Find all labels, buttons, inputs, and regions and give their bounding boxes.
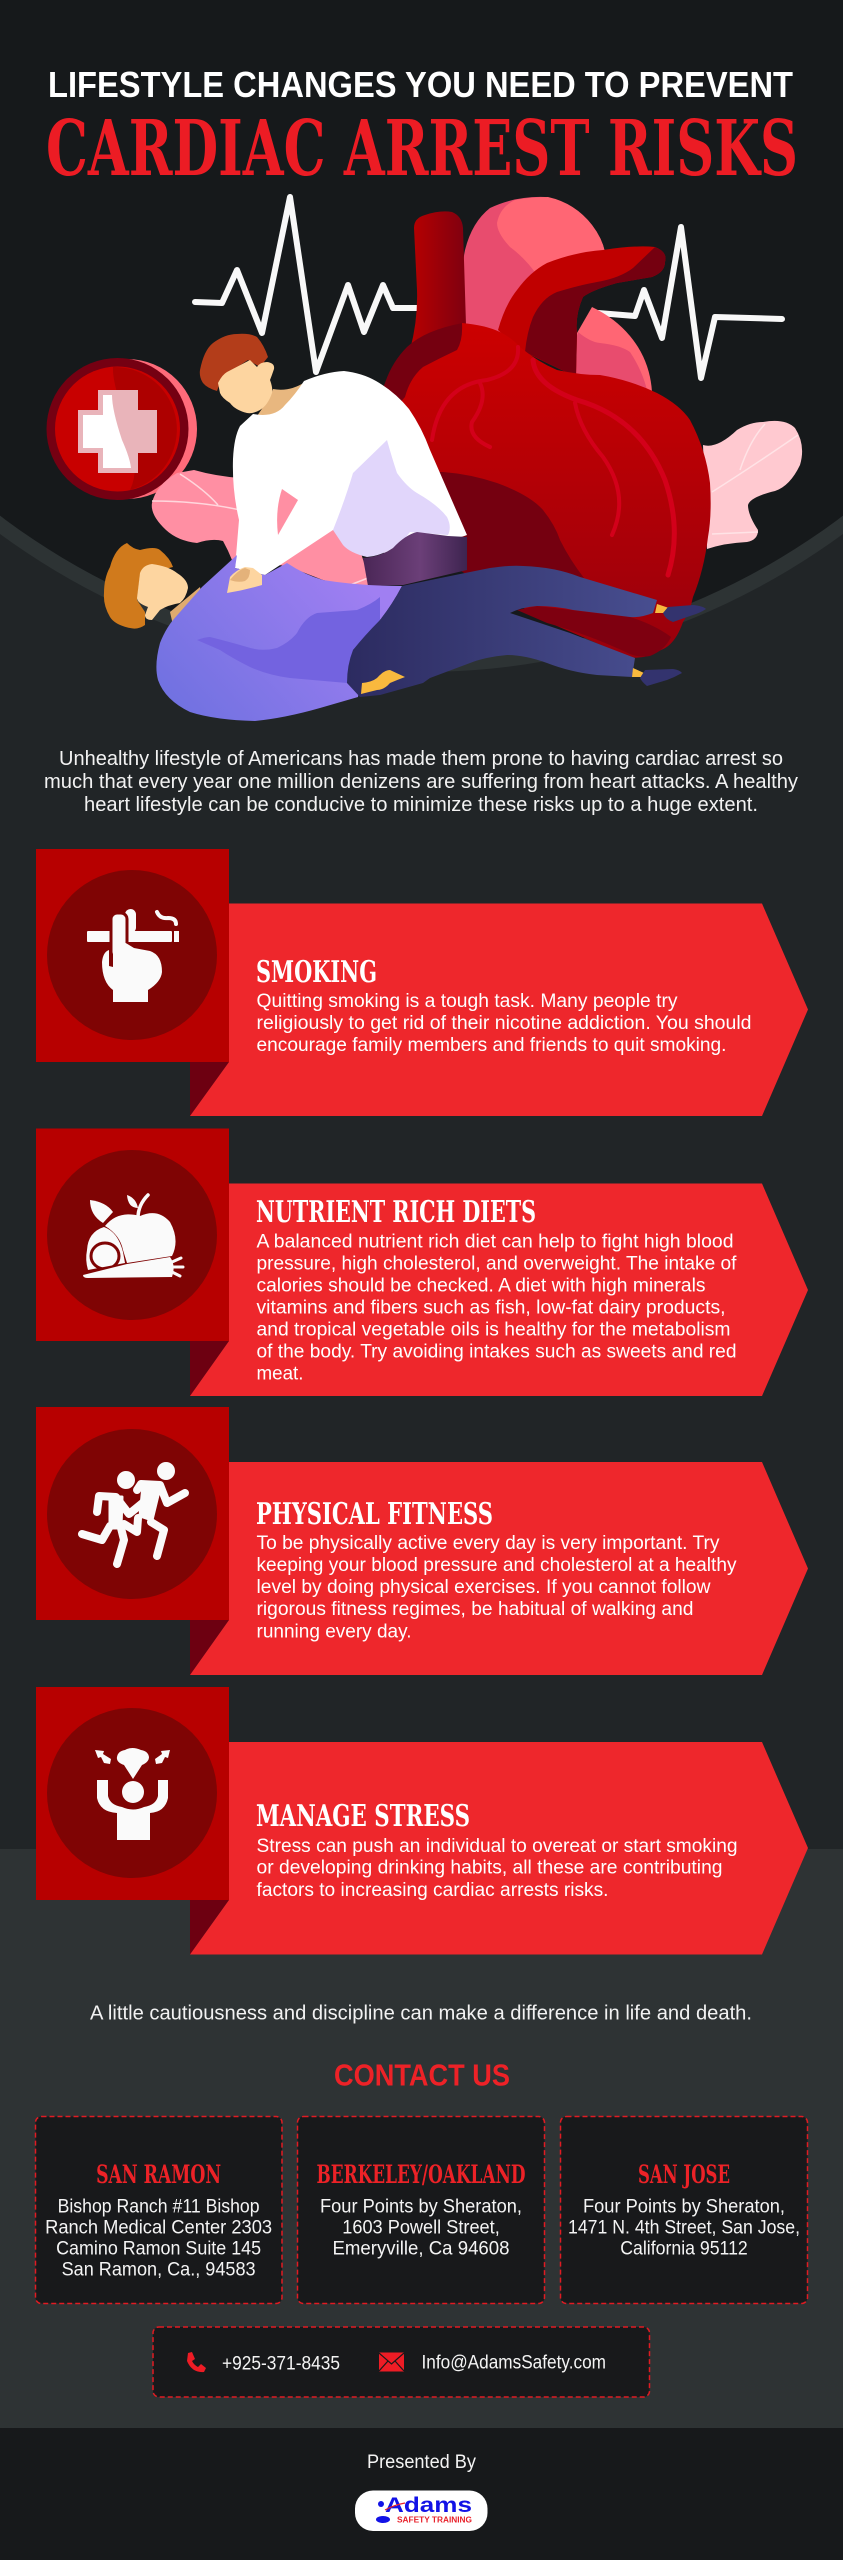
card: San Ramon: [36, 2116, 282, 2304]
heading: SMOKING: [256, 955, 377, 990]
body text: factors to increasing cardiac arrests risks.: [256, 1880, 608, 1901]
panel: smoking: [36, 849, 808, 1116]
navy trousers: [347, 566, 657, 697]
body text: level by doing physical exercises. If you cannot follow: [256, 1577, 711, 1598]
neck: [257, 382, 305, 416]
card: Berkeley/Oakland: 1603 Powell Street,: [342, 2218, 500, 2238]
white shirt: [233, 371, 467, 575]
aorta tube: [410, 211, 466, 350]
card: San Ramon: Bishop Ranch #11 Bishop: [58, 2196, 260, 2218]
icon: medical cross badge: [46, 358, 197, 500]
coronary veins: [432, 347, 674, 575]
card: San Ramon: SAN RAMON: [96, 2160, 221, 2189]
heart: [380, 197, 711, 658]
panel: manage stress: [36, 1687, 808, 1954]
body text: running every day.: [256, 1622, 412, 1642]
card: San Jose: Four Points by Sheraton,: [583, 2196, 785, 2218]
body text: encourage family members and friends to quit smoking.: [256, 1035, 726, 1056]
body text: keeping your blood pressure and cholesterol at a healthy: [256, 1555, 737, 1576]
panel: nutrient rich diets: [36, 1128, 808, 1396]
card: San Jose: SAN JOSE: [638, 2160, 730, 2189]
face: [137, 564, 188, 620]
purple shirt: [156, 555, 402, 721]
phone number: +925-371-8435: [222, 2354, 340, 2374]
back pink lobes: [462, 197, 605, 334]
rescuer trousers: [363, 532, 467, 586]
email address: Info@AdamsSafety.com: [422, 2352, 606, 2374]
hair: [200, 334, 268, 391]
heading: NUTRIENT RICH DIETS: [256, 1195, 536, 1230]
body text: [256, 991, 752, 1056]
card: San Jose: 1471 N. 4th Street, San Jose,: [568, 2218, 800, 2238]
aortic arch: [498, 246, 666, 377]
body text: [256, 1232, 737, 1384]
neck: [170, 587, 202, 625]
intro text: Unhealthy lifestyle of Americans has made them prone to having cardiac arrest so: [59, 748, 783, 770]
heading: MANAGE STRESS: [256, 1799, 470, 1834]
left dark lobe: [380, 323, 470, 410]
intro text: [44, 748, 798, 816]
title: [46, 64, 798, 194]
body text: and tropical vegetable oils is healthy for the metabolism: [256, 1320, 730, 1340]
contact us heading: CONTACT US: [334, 2058, 510, 2092]
panel: physical fitness: [36, 1407, 808, 1675]
body text: vitamins and fibers such as fish, low-fat dairy products,: [256, 1298, 726, 1318]
icon: apple and carrot: [83, 1195, 183, 1278]
left leaf: [152, 470, 372, 588]
card: Berkeley/Oakland: [298, 2116, 544, 2304]
heading: PHYSICAL FITNESS: [256, 1497, 493, 1532]
shirt shadow: [333, 440, 450, 557]
body text: pressure, high cholesterol, and overweight. The intake of: [256, 1254, 737, 1274]
logo: Adams Safety Training: Adams: [385, 2494, 472, 2517]
lower dark chamber: [425, 472, 584, 578]
hand: [227, 567, 262, 593]
icon: phone: [187, 2352, 206, 2372]
icon: mail: [379, 2352, 404, 2372]
body text: Quitting smoking is a tough task. Many people try: [256, 991, 678, 1012]
closing statement: A little cautiousness and discipline can make a difference in life and death.: [90, 2002, 752, 2024]
heartbeat line: [195, 197, 782, 378]
gap under arm: [277, 489, 298, 535]
body text: Stress can push an individual to overeat or start smoking: [256, 1836, 738, 1857]
card: Berkeley/Oakland: Four Points by Sheraton,: [320, 2196, 522, 2218]
logo: Adams Safety Training: SAFETY TRAINING: [397, 2516, 472, 2524]
icon: runners: [82, 1462, 185, 1564]
icon: hand with cigarette: [87, 909, 179, 1002]
body text: A balanced nutrient rich diet can help to fight high blood: [256, 1232, 734, 1252]
socks: [655, 604, 669, 613]
card: San Jose: [560, 2116, 808, 2304]
body text: [256, 1533, 737, 1642]
body text: or developing drinking habits, all these are contributing: [256, 1858, 722, 1878]
body text: rigorous fitness regimes, be habitual of walking and: [256, 1599, 694, 1620]
body text: meat.: [256, 1364, 304, 1384]
shirt fold: [197, 597, 380, 683]
hair: [104, 543, 173, 629]
intro text: heart lifestyle can be conducive to minimize these risks up to a huge extent.: [84, 794, 758, 816]
card: Berkeley/Oakland: Emeryville, Ca 94608: [332, 2238, 510, 2260]
contact bar: [153, 2327, 650, 2397]
patient: [104, 543, 706, 721]
card: San Ramon: San Ramon, Ca., 94583: [62, 2260, 256, 2280]
card: San Ramon: Ranch Medical Center 2303: [45, 2218, 272, 2238]
card: Berkeley/Oakland: BERKELEY/OAKLAND: [316, 2160, 526, 2189]
face: [218, 360, 274, 413]
card: San Ramon: Camino Ramon Suite 145: [56, 2238, 261, 2260]
body text: To be physically active every day is very important. Try: [256, 1533, 720, 1554]
shoes: [663, 605, 706, 622]
logo: Adams Safety Training: [355, 2490, 488, 2531]
body text: religiously to get rid of their nicotine addiction. You should: [256, 1013, 752, 1034]
body text: of the body. Try avoiding intakes such as sweets and red: [256, 1342, 736, 1362]
body text: calories should be checked. A diet with high minerals: [256, 1276, 706, 1296]
main heart body: [385, 323, 711, 658]
right leaf: [703, 421, 802, 549]
presented by: Presented By: [367, 2452, 476, 2473]
rescuer: [200, 334, 467, 586]
intro text: much that every year one million denizens are suffering from heart attacks. A healthy: [44, 771, 798, 793]
card: San Jose: California 95112: [620, 2238, 748, 2260]
body text: [256, 1836, 738, 1901]
hero illustration: CPR and heart: [46, 197, 802, 721]
icon: stressed person: [95, 1748, 170, 1840]
